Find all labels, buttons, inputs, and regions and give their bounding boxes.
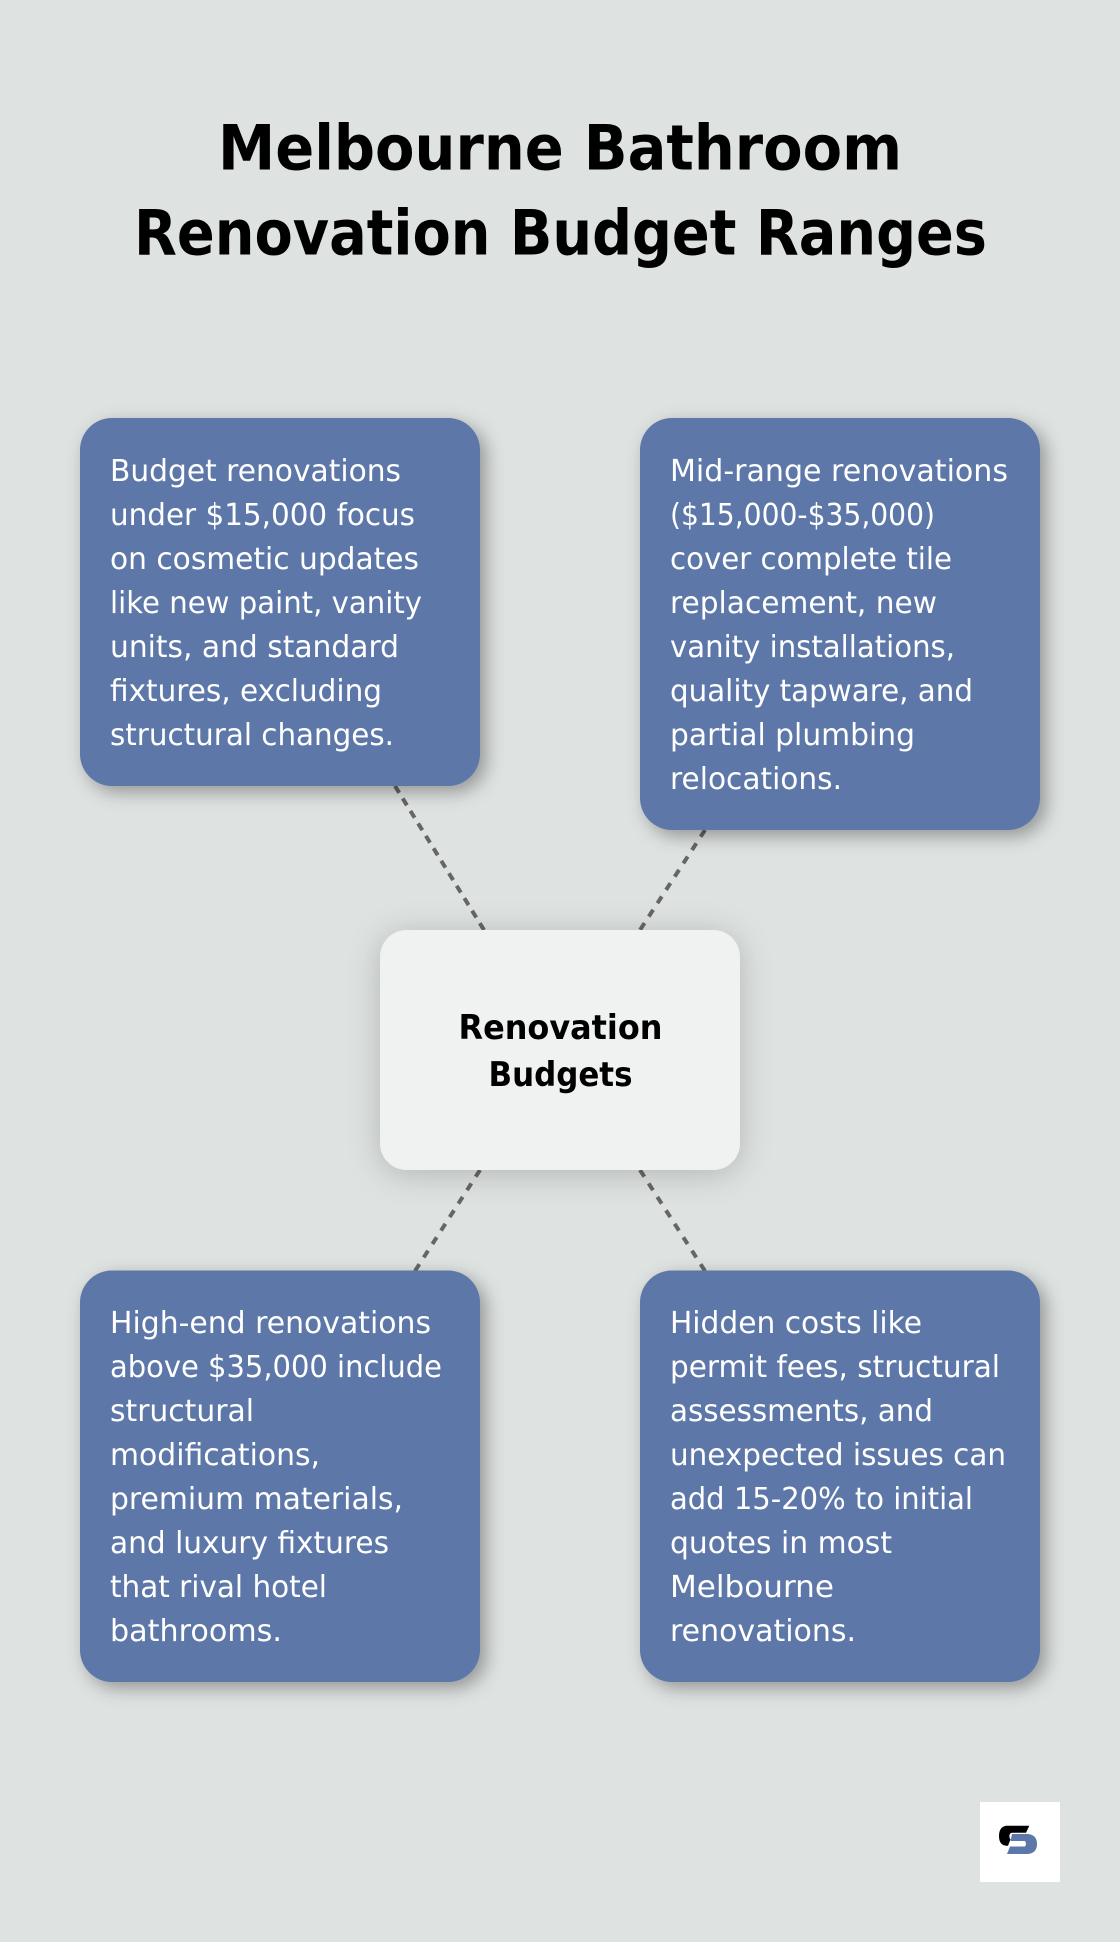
panel: high-end renovations: High-end renovations <box>110 1306 431 1341</box>
panel: mid-range renovations: replacement, new <box>670 586 937 621</box>
connector: budget card to centre <box>395 786 484 930</box>
title: Melbourne Bathroom <box>218 112 902 184</box>
panel: high-end renovations: bathrooms. <box>110 1614 282 1649</box>
title <box>134 112 987 270</box>
panel: mid-range renovations <box>640 418 1040 830</box>
panel: mid-range renovations: ($15,000-$35,000) <box>670 498 935 533</box>
panel: hidden costs: Hidden costs like <box>670 1306 922 1341</box>
panel: hidden costs: unexpected issues can <box>670 1438 1006 1473</box>
panel: high-end renovations: premium materials, <box>110 1482 403 1517</box>
panel: centre node: Renovation <box>458 1008 662 1048</box>
panel: hidden costs: permit fees, structural <box>670 1350 1000 1385</box>
panel: mid-range renovations: Mid-range renovations <box>670 454 1008 489</box>
icon: logo badge <box>980 1802 1060 1882</box>
panel: budget renovations: like new paint, vanity <box>110 586 422 621</box>
panel: mid-range renovations: vanity installations, <box>670 630 955 665</box>
connector: hidden costs card to centre <box>640 1170 705 1271</box>
title: Renovation Budget Ranges <box>134 196 987 270</box>
panel: hidden costs <box>640 1270 1040 1682</box>
panel: hidden costs: add 15-20% to initial <box>670 1482 973 1517</box>
panel: mid-range renovations: relocations. <box>670 762 842 797</box>
panel: mid-range renovations: cover complete tile <box>670 542 952 577</box>
panel: budget renovations: on cosmetic updates <box>110 542 419 577</box>
connector: high-end card to centre <box>415 1170 480 1271</box>
connector: mid-range card to centre <box>640 830 705 930</box>
panel: budget renovations: units, and standard <box>110 630 399 665</box>
panel: budget renovations: under $15,000 focus <box>110 498 415 533</box>
panel: mid-range renovations: quality tapware, and <box>670 674 973 709</box>
panel: budget renovations: Budget renovations <box>110 454 401 489</box>
panel: high-end renovations: modifications, <box>110 1438 320 1473</box>
panel: hidden costs: quotes in most <box>670 1526 892 1561</box>
panel: mid-range renovations: partial plumbing <box>670 718 915 753</box>
panel: hidden costs: assessments, and <box>670 1394 933 1429</box>
panel: high-end renovations: that rival hotel <box>110 1570 327 1605</box>
panel: hidden costs: renovations. <box>670 1614 856 1649</box>
panel: hidden costs: Melbourne <box>670 1570 834 1605</box>
panel: high-end renovations <box>80 1270 480 1682</box>
panel: budget renovations: fixtures, excluding <box>110 674 382 709</box>
panel: budget renovations <box>80 418 480 786</box>
panel: high-end renovations: structural <box>110 1394 254 1429</box>
panel: budget renovations: structural changes. <box>110 718 394 753</box>
panel: centre node: Budgets <box>488 1055 632 1095</box>
panel: centre node <box>380 930 740 1170</box>
panel: high-end renovations: and luxury fixtures <box>110 1526 389 1561</box>
panel: high-end renovations: above $35,000 include <box>110 1350 442 1385</box>
